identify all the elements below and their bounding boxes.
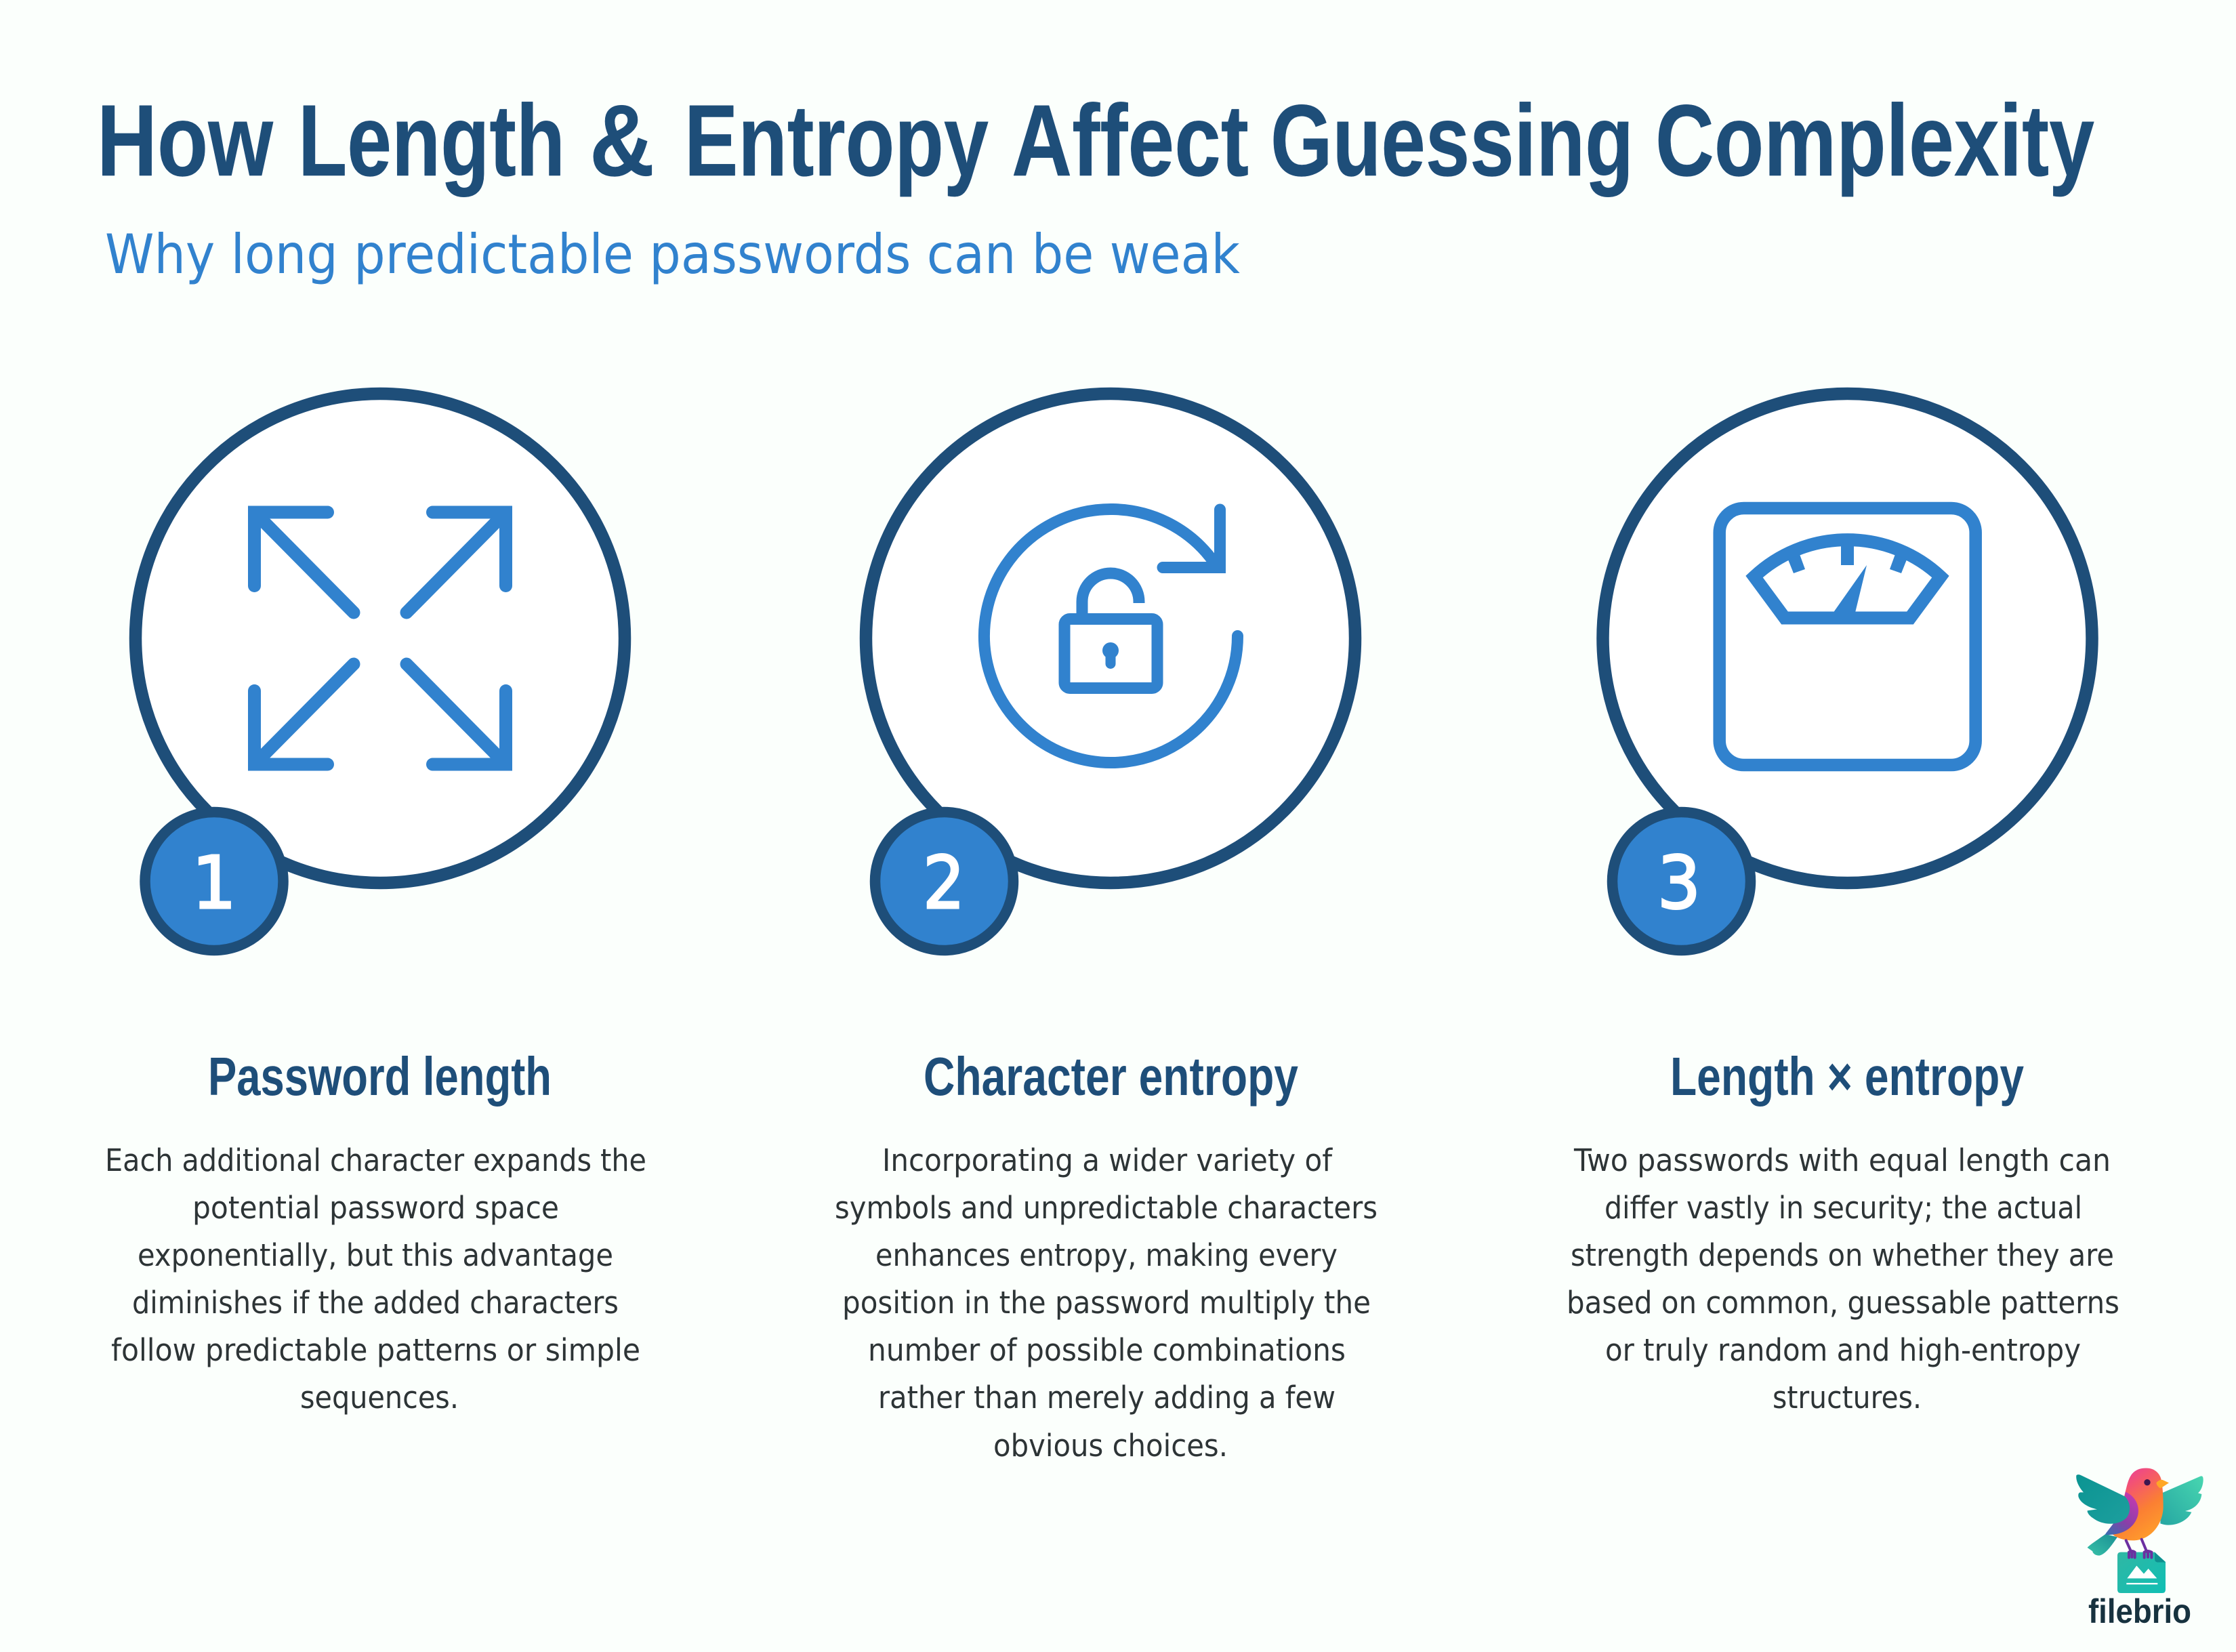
description: password length: follow predictable patterns or simple — [111, 1332, 640, 1368]
description: length times entropy: based on common, guessable patterns — [1567, 1285, 2119, 1321]
description: character entropy: symbols and unpredictable characters — [835, 1190, 1378, 1226]
heading: length times entropy: Length × entropy — [1670, 1046, 2024, 1107]
title: How — [97, 83, 273, 197]
description: password length: exponentially, but this advantage — [138, 1237, 613, 1273]
description: password length: diminishes if the added characters — [132, 1285, 619, 1321]
title: & — [589, 83, 655, 197]
number badge 1 — [145, 812, 283, 950]
description: length times entropy: strength depends on whether they are — [1571, 1237, 2114, 1273]
subtitle: Why long predictable passwords can be weak — [105, 223, 1241, 286]
heading: character entropy: Character entropy — [924, 1046, 1298, 1107]
description: character entropy: position in the password multiply the — [842, 1285, 1371, 1321]
icon: lock with rotating arrow — [984, 510, 1237, 763]
description: character entropy: number of possible combinations — [868, 1332, 1346, 1368]
description: length times entropy: differ vastly in security; the actual — [1604, 1190, 2082, 1226]
description: password length: Each additional character expands the — [105, 1142, 646, 1178]
description: password length — [105, 1142, 646, 1416]
icon circle 3 — [1603, 394, 2092, 883]
number badge 3: 3 — [1657, 842, 1701, 926]
number badge 1: 1 — [192, 842, 236, 926]
panel: character entropy — [835, 394, 1378, 1464]
icon circle 1 — [136, 394, 625, 883]
description: password length: potential password space — [192, 1190, 559, 1226]
logo: filebrio bird: filebrio — [2088, 1592, 2191, 1630]
description: length times entropy: or truly random and high-entropy — [1605, 1332, 2081, 1368]
description: character entropy — [835, 1142, 1378, 1464]
title: Affect — [1012, 83, 1249, 197]
icon: expanding arrows — [255, 512, 505, 764]
number badge 2: 2 — [923, 842, 965, 926]
title — [97, 83, 2094, 197]
title: Entropy — [684, 83, 989, 197]
description: password length: sequences. — [300, 1380, 459, 1416]
description: length times entropy — [1567, 1142, 2119, 1416]
icon: weighing scale — [1720, 508, 1976, 765]
panel: password length — [105, 394, 646, 1416]
panel: length times entropy — [1567, 394, 2119, 1416]
title: Guessing — [1270, 83, 1634, 197]
description: length times entropy: Two passwords with equal length can — [1573, 1142, 2111, 1178]
number badge 3 — [1613, 812, 1751, 950]
description: character entropy: enhances entropy, making every — [875, 1237, 1338, 1273]
logo: filebrio bird — [2076, 1468, 2203, 1630]
description: length times entropy: structures. — [1773, 1380, 1922, 1416]
description: character entropy: rather than merely adding a few — [878, 1380, 1336, 1416]
title: Length — [298, 83, 565, 197]
heading: password length: Password length — [208, 1046, 552, 1107]
description: character entropy: obvious choices. — [993, 1428, 1228, 1464]
title: Complexity — [1655, 83, 2094, 197]
number badge 2 — [875, 812, 1014, 950]
description: character entropy: Incorporating a wider variety of — [882, 1142, 1333, 1178]
icon circle 2 — [866, 394, 1355, 883]
